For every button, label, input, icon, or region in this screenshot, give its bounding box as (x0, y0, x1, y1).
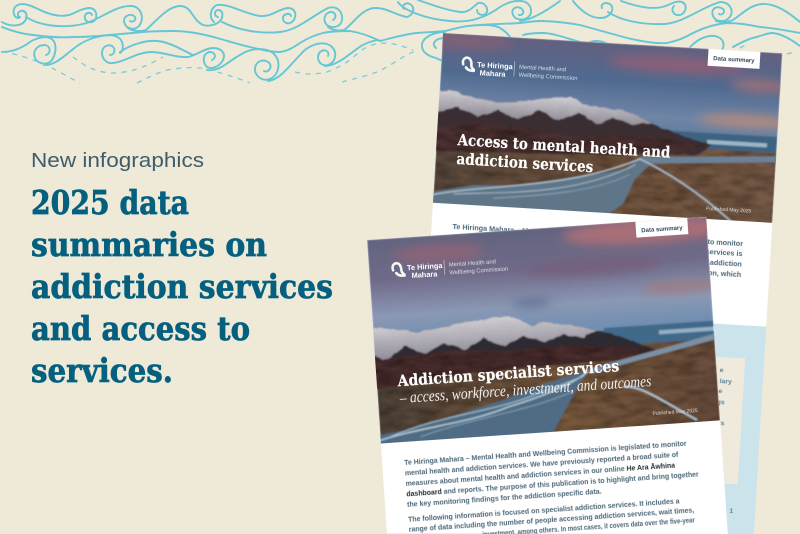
report intro text: the key monitoring findings for the addiction specific data. (407, 487, 602, 509)
commission logo: Mental Health and (449, 259, 496, 268)
report intro text: services is (705, 247, 743, 258)
inset box text (709, 367, 742, 515)
main heading: services. (31, 351, 173, 390)
inset box text: e (719, 367, 724, 374)
commission logo (462, 57, 578, 83)
report subtitle: – access, workforce, investment, and outcomes (398, 373, 652, 407)
report intro text: The following information is focused on specialist addiction services. It includes a (408, 496, 681, 524)
report intro text: range of data including the number of people accessing addiction services, wait times, (408, 505, 694, 534)
inset box text: gs (716, 399, 725, 406)
inset box text: nt (714, 430, 722, 437)
commission logo: Wellbeing Commission (518, 73, 578, 82)
report intro text: Te Hiringa Mahara – Mental Health and Wellbeing Commission is legislated to monitor (404, 439, 687, 467)
inset box text: l (715, 409, 717, 416)
commission logo: Te Hiringa (477, 60, 514, 71)
main heading: addiction services (31, 267, 333, 306)
report title: Access to mental health and (456, 130, 671, 162)
report intro text: dashboard and reports. The purpose of this publication is to highlight and bring together (406, 469, 699, 498)
light blue lower page (413, 307, 766, 534)
cream inset box (457, 342, 745, 484)
panel: back report cover, access to services (413, 33, 782, 534)
report title: Addiction specialist services (396, 356, 620, 390)
main heading: and access to (31, 309, 250, 348)
publication date: Published May 2025 (706, 206, 752, 215)
tab: data summary (708, 49, 760, 69)
report intro text (449, 222, 744, 302)
panel: front report cover, addiction specialist services (362, 212, 753, 534)
cover photo: mountains and braided river (432, 33, 782, 223)
commission logo (392, 255, 508, 281)
report intro text: mental health and addiction services. We have previously reported a broad suite of (405, 450, 679, 477)
publication date: Published May 2025 (652, 408, 698, 417)
commission logo: Wellbeing Commission (449, 266, 508, 276)
report intro text: al (702, 291, 708, 300)
inset box text: lary (720, 378, 732, 386)
tab: data summary: Data summary (641, 225, 683, 234)
intro label: New infographics (31, 149, 204, 172)
main heading: 2025 data (31, 183, 189, 222)
report intro text: Te Hiringa Mahara – Mental Health and Wellbeing Commission is legislated (452, 222, 708, 246)
report intro text: addiction (710, 258, 742, 269)
report page (427, 33, 782, 327)
main heading (31, 183, 333, 390)
main heading: summaries on (31, 225, 267, 264)
inset box text: e (718, 388, 723, 395)
report title: addiction services (456, 149, 594, 176)
report intro text (404, 438, 702, 534)
cover photo: mountains and braided river (367, 217, 720, 444)
inset box text: 1 (729, 508, 734, 515)
tab: data summary: Data summary (713, 56, 755, 65)
report intro text: measures about mental health and addiction services in our online He Ara Āwhina (405, 461, 676, 488)
report title (455, 130, 671, 181)
report intro text: to monitor (707, 237, 744, 248)
commission logo: Mahara (479, 68, 507, 79)
dashed wave accents (2, 43, 795, 83)
tab: data summary (635, 218, 688, 238)
commission logo: Te Hiringa (407, 261, 444, 272)
inset box text: cts (714, 420, 725, 427)
commission logo: Mental Health and (519, 65, 566, 73)
report intro text: on, which (708, 268, 741, 279)
decorative wave border (2, 0, 800, 81)
report page (367, 217, 728, 534)
commission logo: Mahara (411, 269, 439, 280)
